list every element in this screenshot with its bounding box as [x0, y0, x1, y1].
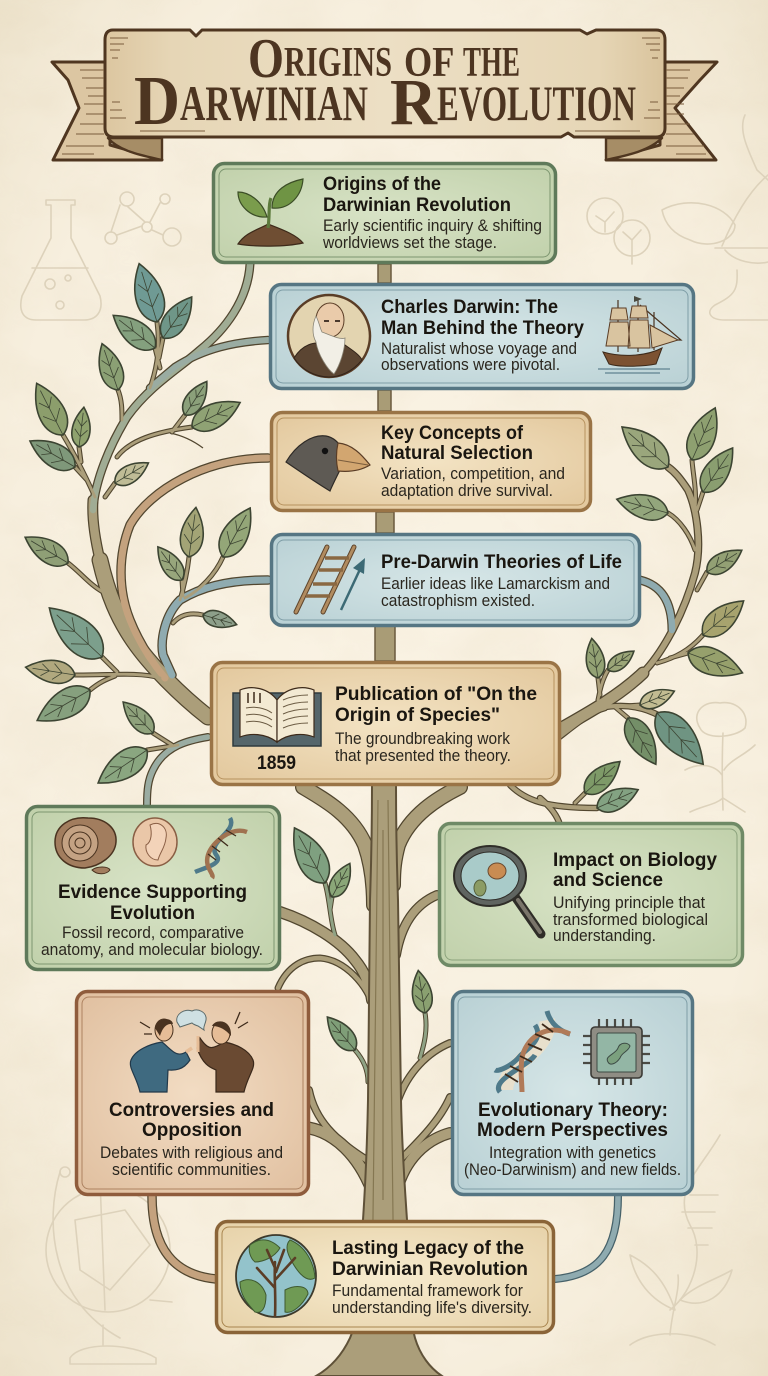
panel: controversies	[76, 992, 308, 1194]
text: origins description	[322, 217, 542, 252]
heading: evidence: Evolution	[110, 902, 195, 924]
banner: folds	[108, 138, 662, 160]
text: controversies description	[100, 1144, 283, 1179]
heading: origins: Origins of the	[323, 173, 441, 195]
heading: impact	[553, 849, 717, 891]
icon: computer chip	[583, 1019, 650, 1085]
heading: darwin: Man Behind the Theory	[381, 317, 584, 339]
text: impact description: Unifying principle that	[553, 894, 705, 912]
text: evidence description: anatomy, and molecular biology.	[41, 941, 263, 959]
connector: modern perspectives to legacy	[555, 1196, 618, 1279]
title text line two: ARWINIAN	[180, 75, 368, 131]
text: modern perspectives description	[464, 1144, 681, 1179]
text: legacy description	[332, 1282, 532, 1317]
sketch: globe	[46, 1167, 172, 1364]
panel: impact	[440, 824, 742, 966]
text: publication description: The groundbreaking work	[335, 730, 511, 748]
tree: left vines	[63, 264, 268, 805]
icon: ladder and arrow	[296, 547, 365, 612]
heading: key concepts: Key Concepts of	[381, 422, 523, 444]
text: modern perspectives description: (Neo-Darwinism) and new fields.	[464, 1161, 681, 1179]
heading: origins: Darwinian Revolution	[323, 194, 511, 216]
heading: publication	[335, 683, 537, 726]
title text: THE	[463, 40, 520, 86]
heading: controversies	[109, 1099, 274, 1141]
title banner	[52, 28, 717, 160]
text: modern perspectives description: Integration with genetics	[489, 1144, 656, 1162]
sketch: DNA and sprout	[630, 1135, 732, 1345]
text: key concepts description	[381, 465, 565, 500]
panel: pre-darwin theories	[272, 534, 640, 626]
icon: DNA strand	[495, 1011, 570, 1092]
text: origins description: worldviews set the stage.	[322, 234, 497, 252]
panel: origins	[214, 164, 556, 262]
tree: right vines	[510, 460, 707, 822]
heading: modern perspectives	[477, 1099, 668, 1141]
label: year 1859: 1859	[257, 752, 296, 774]
heading: darwin: Charles Darwin: The	[381, 296, 558, 318]
icon: darwin portrait	[288, 295, 370, 377]
banner: left tail	[52, 62, 162, 160]
icon: ammonite fossil	[55, 818, 116, 874]
panel: evidence	[26, 806, 280, 970]
heading: evidence	[58, 881, 247, 924]
heading: controversies: Opposition	[142, 1119, 242, 1141]
sketch: molecule	[105, 192, 181, 246]
panel: lasting legacy	[216, 1222, 554, 1332]
leaves	[19, 260, 751, 1056]
title text: OF	[404, 40, 453, 86]
heading: pre-darwin: Pre-Darwin Theories of Life	[381, 551, 622, 573]
icon: embryo	[133, 818, 177, 866]
text: controversies description: scientific communities.	[112, 1161, 271, 1179]
title text: O	[248, 28, 284, 90]
icon: finch head	[286, 436, 370, 491]
sketch: small tree	[685, 703, 755, 812]
heading: impact: Impact on Biology	[553, 849, 717, 871]
icon: open book	[233, 688, 321, 746]
text: pre-darwin description	[381, 575, 610, 610]
text: key concepts description: Variation, competition, and	[381, 465, 565, 483]
heading: publication: Publication of "On the	[335, 683, 537, 705]
panel: publication	[212, 662, 560, 784]
sketch: flask	[21, 200, 101, 320]
heading: legacy: Lasting Legacy of the	[332, 1237, 524, 1259]
heading: legacy	[332, 1237, 528, 1280]
title text line two: R	[390, 66, 438, 139]
heading: modern perspectives: Evolutionary Theory:	[478, 1099, 668, 1121]
text: impact description: transformed biological	[553, 911, 708, 929]
text: evidence description	[41, 924, 263, 959]
heading: legacy: Darwinian Revolution	[332, 1258, 528, 1280]
title text line two: D	[134, 63, 180, 140]
icon: globe with tree	[236, 1235, 316, 1317]
banner: right tail	[606, 62, 717, 160]
icon: sprout	[238, 179, 303, 246]
text: key concepts description: adaptation drive survival.	[381, 482, 553, 500]
heading: modern perspectives: Modern Perspectives	[477, 1119, 668, 1141]
title text: RIGINS	[284, 40, 392, 86]
heading: controversies: Controversies and	[109, 1099, 274, 1121]
text: publication description	[335, 730, 511, 765]
text: impact description	[553, 894, 708, 945]
panel: key concepts	[272, 412, 590, 510]
icon: DNA helix	[195, 818, 247, 878]
text: origins description: Early scientific inquiry & shifting	[323, 217, 542, 235]
text: darwin description	[381, 340, 577, 374]
icon: magnifying glass	[454, 846, 541, 934]
heading: evidence: Evidence Supporting	[58, 881, 247, 903]
connector: controversies to legacy	[152, 1196, 216, 1279]
icon: debating scientists	[130, 1010, 254, 1092]
heading: darwin	[381, 296, 584, 339]
sketch: cells	[587, 198, 650, 264]
heading: key concepts: Natural Selection	[381, 442, 533, 464]
heading: key concepts	[381, 422, 533, 464]
heading: impact: and Science	[553, 869, 663, 891]
sketch: microscope	[662, 115, 768, 320]
text: publication description: that presented the theory.	[335, 747, 511, 765]
title text line two: EVOLUTION	[437, 75, 636, 131]
panel: modern perspectives	[452, 992, 692, 1194]
text: darwin description: Naturalist whose voyage and	[381, 340, 577, 358]
tree: lower branches	[278, 787, 460, 1190]
text: pre-darwin description: Earlier ideas like Lamarckism and	[381, 575, 610, 593]
tree: trunk and central post	[316, 264, 442, 1376]
text: pre-darwin description: catastrophism existed.	[381, 592, 535, 610]
text: legacy description: understanding life's diversity.	[332, 1299, 532, 1317]
text: impact description: understanding.	[553, 927, 656, 945]
banner: main scroll	[105, 30, 665, 137]
panel: charles darwin	[270, 284, 694, 388]
text: controversies description: Debates with religious and	[100, 1144, 283, 1162]
text: evidence description: Fossil record, comparative	[62, 924, 244, 942]
heading: publication: Origin of Species"	[335, 704, 500, 726]
text: darwin description: observations were pivotal.	[381, 356, 560, 374]
text: legacy description: Fundamental framework for	[332, 1282, 523, 1300]
heading: origins	[323, 173, 511, 216]
icon: sailing ship	[598, 296, 681, 373]
